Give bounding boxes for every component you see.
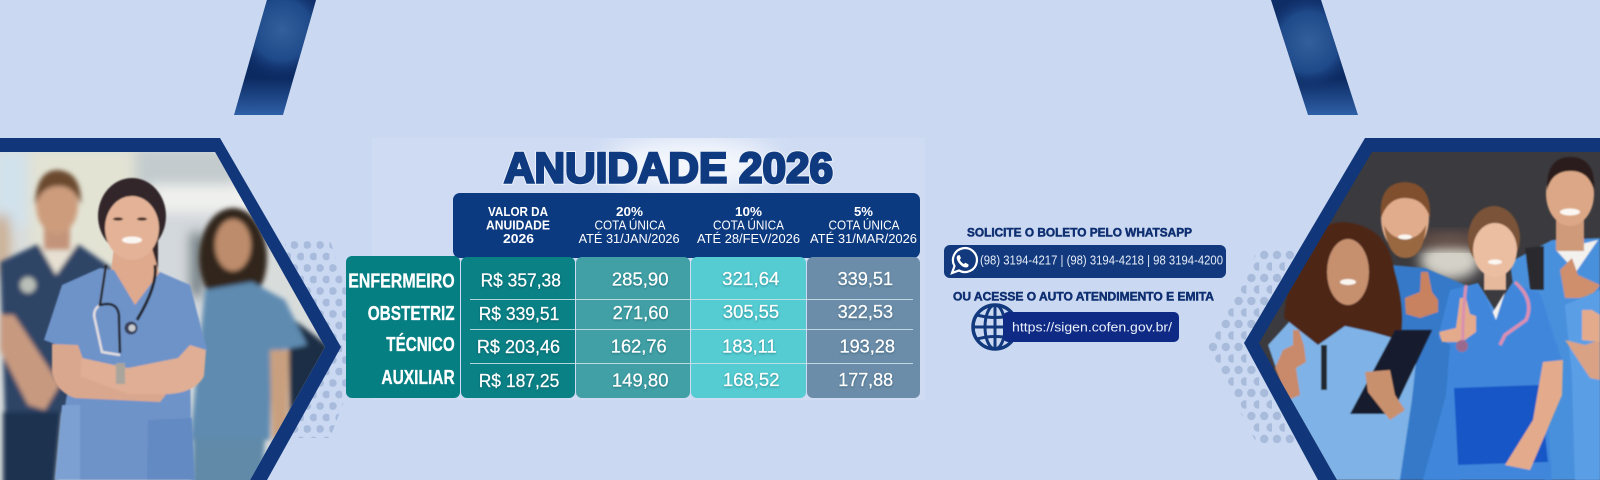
values: 5 percent discount: 322,53 [838,302,893,322]
heading: self-service: OU ACESSE O AUTO ATENDIMENTO E EMITA [953,290,1214,304]
photo: students right [1250,152,1600,480]
header text: 5 percent: ATÉ 31/MAR/2026 [810,231,917,246]
center woman [1423,206,1563,480]
row labels: TÉCNICO [386,333,455,356]
header text: 5 percent: COTA ÚNICA [828,218,900,232]
background woman [190,208,330,480]
values: full annuity: R$ 187,25 [479,371,559,391]
header text: 20 percent: 20% [616,204,643,219]
phone pill [944,245,1226,278]
column: professions [346,256,460,398]
header text: 20 percent: ATÉ 31/JAN/2026 [579,231,680,246]
values: 5 percent discount: 339,51 [838,269,893,289]
row labels: OBSTETRIZ [368,302,455,325]
icon: globe [973,305,1017,349]
ribbon: top right [1271,0,1358,115]
foreground nurse [44,178,207,480]
header text: 20 percent: COTA ÚNICA [594,218,666,232]
header text: 5 percent: 5% [854,204,873,219]
row labels: AUXILIAR [381,366,455,389]
dot pattern: right [1207,250,1296,446]
values: full annuity: R$ 357,38 [481,270,561,290]
column: full value [461,257,575,398]
heading: whatsapp request: SOLICITE O BOLETO PELO WHATSAPP [967,226,1192,240]
curly-haired woman [1268,222,1432,480]
header text: 10 percent: 10% [735,204,762,219]
title: ANUIDADE 2026 [504,144,833,192]
values: 10 percent discount: 305,55 [723,302,779,322]
photo: nurses left [0,150,330,480]
far right woman [1565,290,1600,480]
header text: annuity value: VALOR DA [488,204,549,219]
header text: annuity value: ANUIDADE [486,218,550,232]
values: 5 percent discount: 177,88 [838,370,893,390]
header text: 10 percent: COTA ÚNICA [713,218,784,232]
values: full annuity: R$ 339,51 [479,304,559,324]
values: 20 percent discount: 162,76 [611,336,667,356]
header text: 20 percent [579,204,680,246]
column: 10 percent [691,257,806,398]
title: ANUIDADE 2026 [504,144,833,192]
man back right [1510,157,1600,480]
frame: right hexagon [1244,138,1600,480]
values: 10 percent discount: 168,52 [723,370,780,390]
header text: 10 percent: ATÉ 28/FEV/2026 [697,231,800,246]
url pill [1003,312,1179,342]
values: 20 percent discount: 271,60 [613,303,669,323]
phone numbers: (98) 3194-4217 | (98) 3194-4218 | 98 3194-4200 [980,254,1223,268]
title glow [605,137,775,193]
row labels: ENFERMEIRO [348,270,455,292]
url text: https://sigen.cofen.gov.br/ [1012,320,1172,334]
row labels [348,270,455,389]
icon: whatsapp [952,248,977,273]
header text: annuity value: 2026 [503,231,534,246]
values: full annuity [477,270,561,391]
bearded man [1381,182,1465,480]
table backdrop [372,138,925,400]
row dividers [470,300,913,364]
ribbon: top left [234,0,316,115]
header text: 5 percent [810,204,917,246]
values: 5 percent discount: 193,28 [840,336,895,356]
values: 10 percent discount: 321,64 [722,269,780,289]
table: annuity values [346,193,920,398]
column: 5 percent [807,257,920,398]
values: 20 percent discount [611,270,669,390]
values: 10 percent discount: 183,11 [722,336,777,356]
values: 5 percent discount [838,269,895,390]
dot pattern: left [285,240,365,438]
background man [0,170,112,480]
values: full annuity: R$ 203,46 [477,337,560,357]
frame: left hexagon [0,138,341,480]
column: 20 percent [576,257,690,398]
values: 20 percent discount: 285,90 [612,270,668,290]
header text: 10 percent [697,204,800,246]
header text: annuity value [486,204,550,246]
values: 10 percent discount [722,269,780,390]
table header band [453,193,920,258]
values: 20 percent discount: 149,80 [612,370,668,390]
